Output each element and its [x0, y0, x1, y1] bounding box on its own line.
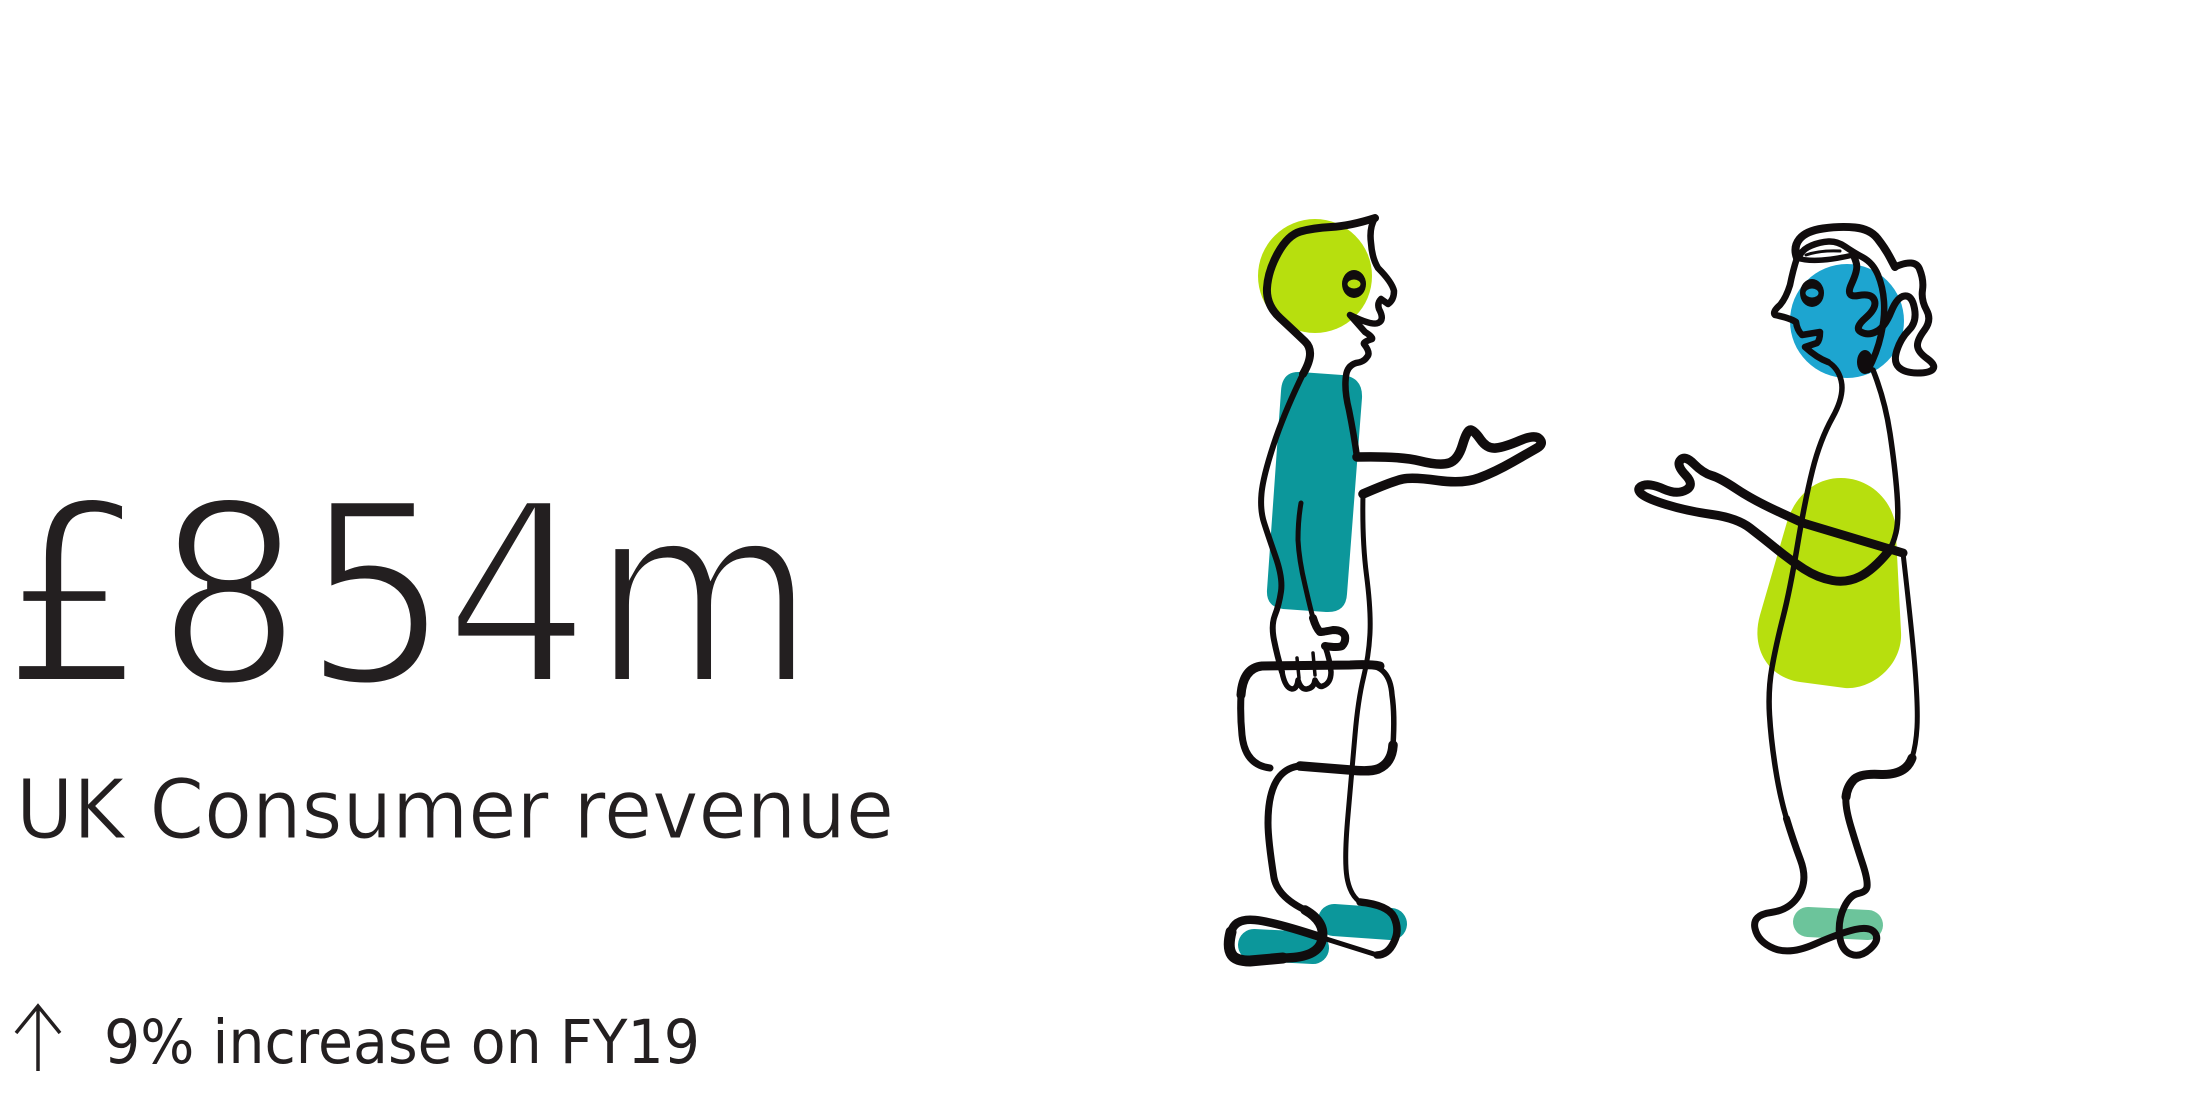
woman eye	[1800, 279, 1824, 307]
illustration: woman	[1639, 227, 1934, 955]
headline figure: £854m: £854m	[1, 450, 816, 743]
woman head colour circle	[1790, 264, 1904, 378]
subheading: UK Consumer revenue: UK Consumer revenue	[16, 763, 894, 858]
man torso colour block	[1267, 372, 1362, 612]
icon: up arrow	[16, 1006, 60, 1071]
man head colour circle	[1258, 219, 1372, 333]
woman shoe colour block	[1808, 922, 1868, 925]
change note: 9% increase on FY19: 9% increase on FY19	[104, 1007, 700, 1078]
woman dress colour block	[1757, 478, 1901, 688]
man line drawing	[1229, 218, 1541, 961]
man shoe colour blocks	[1254, 920, 1391, 948]
man eye	[1342, 270, 1366, 298]
woman line drawing	[1639, 227, 1934, 955]
illustration: man with briefcase	[1229, 218, 1541, 961]
